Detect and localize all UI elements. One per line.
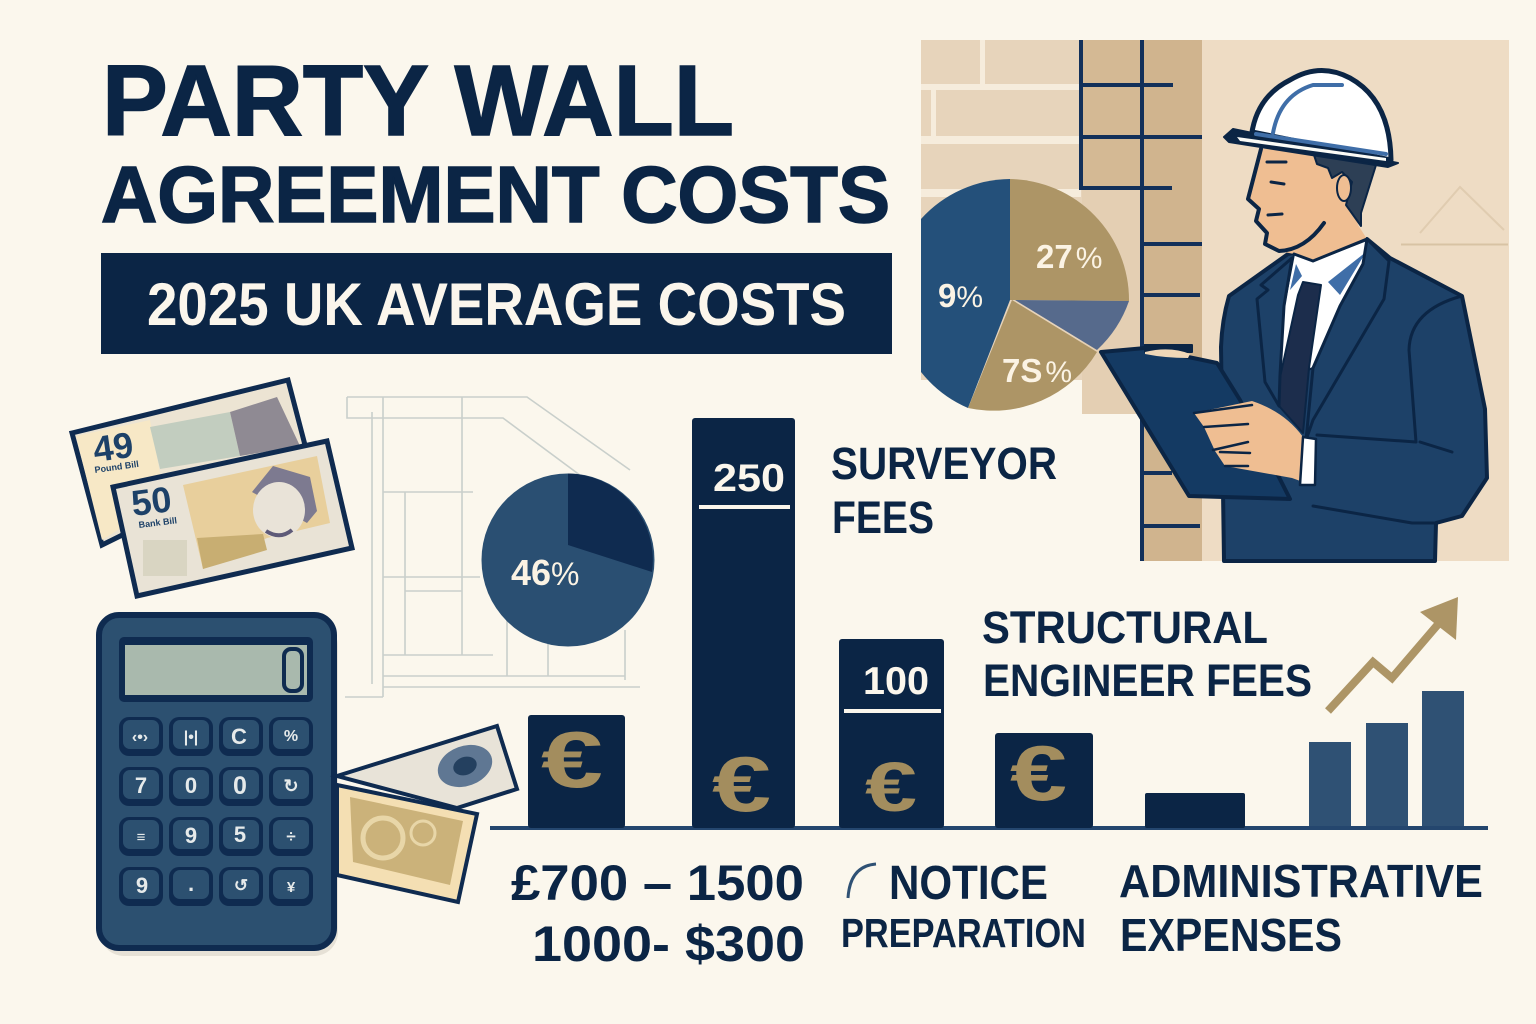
label: administrative expenses: ADMINISTRATIVE [1119,855,1483,907]
icon: calculator: ↻ [283,776,299,796]
brick wall background [921,40,1509,561]
icon: calculator: |•| [184,729,198,746]
bar: euro 2: € [1010,729,1067,817]
ear [1337,175,1351,201]
bar: 250 [692,418,795,828]
label: price ranges: 1000- $300 [532,916,805,972]
bar chart: costs [490,418,1488,830]
pie chart: top right: 7S% [1002,352,1072,389]
subtitle banner: 2025 UK AVERAGE COSTS [147,271,846,338]
icon: calculator: 0 [185,773,197,798]
banknote 49: Pound Bill [94,459,139,475]
clipboard [1101,348,1290,499]
chart icon: growth bars and arrow [1309,597,1464,826]
lapels [1306,239,1389,440]
hard hat [1252,70,1391,160]
face outline [1248,149,1324,251]
hand [1194,401,1303,482]
tie [1279,282,1321,433]
bar: 100: 100 [863,660,929,703]
label: notice preparation: NOTICE [889,857,1048,910]
label: notice preparation [841,857,1086,956]
label: surveyor fees: FEES [832,492,934,543]
bar: 100 [839,639,944,828]
icon: calculator: 7 [135,773,147,798]
title: AGREEMENT COSTS [101,150,890,239]
pie chart: 46% [482,474,654,646]
sleeve seam [1313,296,1462,523]
label: structural engineer fees: STRUCTURAL [982,602,1268,653]
bar: 250: 250 [713,457,785,500]
pie chart: top right [921,179,1129,411]
pie chart: top right: 9% [938,277,983,314]
label: administrative expenses [1119,855,1483,961]
bar: 100: € [865,748,917,826]
banknote 49 [72,380,305,545]
hair [1313,152,1376,226]
icon: calculator: ÷ [286,827,296,846]
title: PARTY WALL [102,45,734,157]
banknote 50: 50 [129,478,174,524]
icon: calculator: . [188,871,194,896]
label: structural engineer fees: ENGINEER FEES [983,655,1312,706]
icon: calculator: 9 [185,823,197,848]
icon: calculator: % [284,728,298,745]
label: price ranges [511,855,805,972]
bar: euro 1 [528,715,625,828]
label: surveyor fees: SURVEYOR [831,438,1057,489]
icon: calculator: ↺ [234,876,248,895]
title [101,45,890,239]
icon: calculator: 9 [136,873,148,898]
icon: calculator: 0 [233,772,247,800]
cuff [1300,437,1316,485]
bar: euro 2 [995,729,1093,828]
pie chart: 46%: 46% [511,552,580,593]
icon: banknotes top [72,380,352,596]
icon: calculator: ¥ [287,879,296,896]
jacket [1221,239,1487,561]
bar: 250: € [712,740,771,828]
icon: calculator: ‹•› [132,729,148,746]
bar: short [1145,793,1245,828]
label: structural engineer fees [982,602,1312,706]
illustration: faint building blueprint [345,397,640,697]
shirt [1280,240,1367,380]
label: administrative expenses: EXPENSES [1120,909,1342,961]
bar: euro 1: € [541,715,603,804]
icon: calculator: C [231,724,247,749]
icon: calculator: ≡ [137,829,146,846]
label: notice preparation: PREPARATION [841,910,1086,956]
neck and face [1248,149,1367,261]
baseline [490,826,1488,830]
banknote 50: Bank Bill [138,515,177,530]
icon: banknotes lower [337,726,517,902]
label: price ranges: £700 – 1500 [511,855,804,911]
pie chart: top right: 27% [1036,238,1102,275]
banknote 50 [113,441,352,596]
subtitle banner [101,253,892,354]
banknote 49: 49 [90,424,136,470]
icon: calculator: 5 [234,822,246,847]
surveyor figure [1101,70,1487,561]
label: surveyor fees [831,438,1057,543]
illustration: surveyor with brick wall and pie chart [921,40,1509,561]
icon: calculator [99,615,338,956]
